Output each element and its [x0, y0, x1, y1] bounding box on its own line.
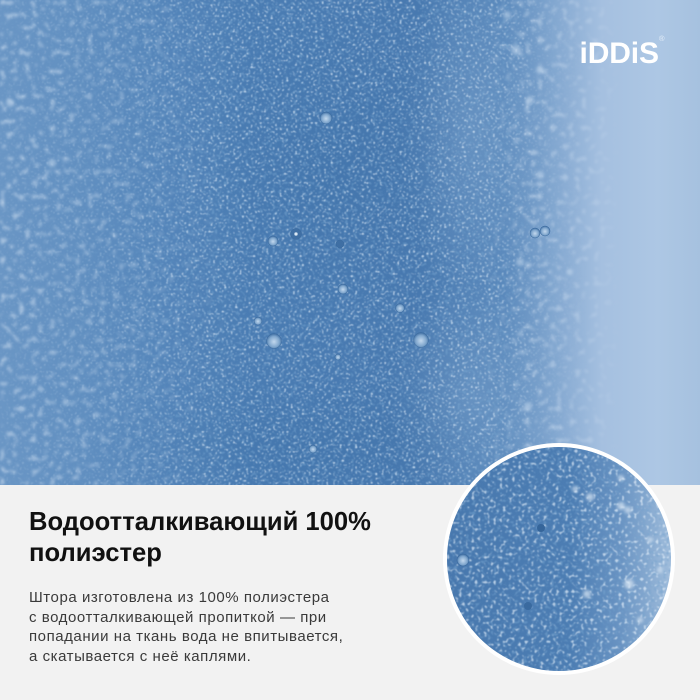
- body text: попадании на ткань вода не впитывается,: [29, 628, 343, 645]
- heading: [29, 508, 371, 567]
- water droplets: [254, 112, 550, 453]
- body text: Штора изготовлена из 100% полиэстера: [29, 589, 330, 606]
- logo: IDDIS: iDDiS: [580, 37, 659, 70]
- body text: [29, 589, 343, 664]
- body text: а скатывается с неё каплями.: [29, 648, 251, 664]
- blurred droplets at the fabric's right edge: [6, 11, 573, 410]
- heading: Водоотталкивающий 100%: [29, 508, 371, 536]
- photo: wet blue fabric with water droplets: [0, 0, 700, 520]
- body text: с водоотталкивающей пропиткой — при: [29, 608, 327, 626]
- logo: IDDIS: ®: [659, 34, 665, 43]
- inset circle: close-up of fabric: [443, 443, 675, 675]
- heading: полиэстер: [29, 539, 162, 567]
